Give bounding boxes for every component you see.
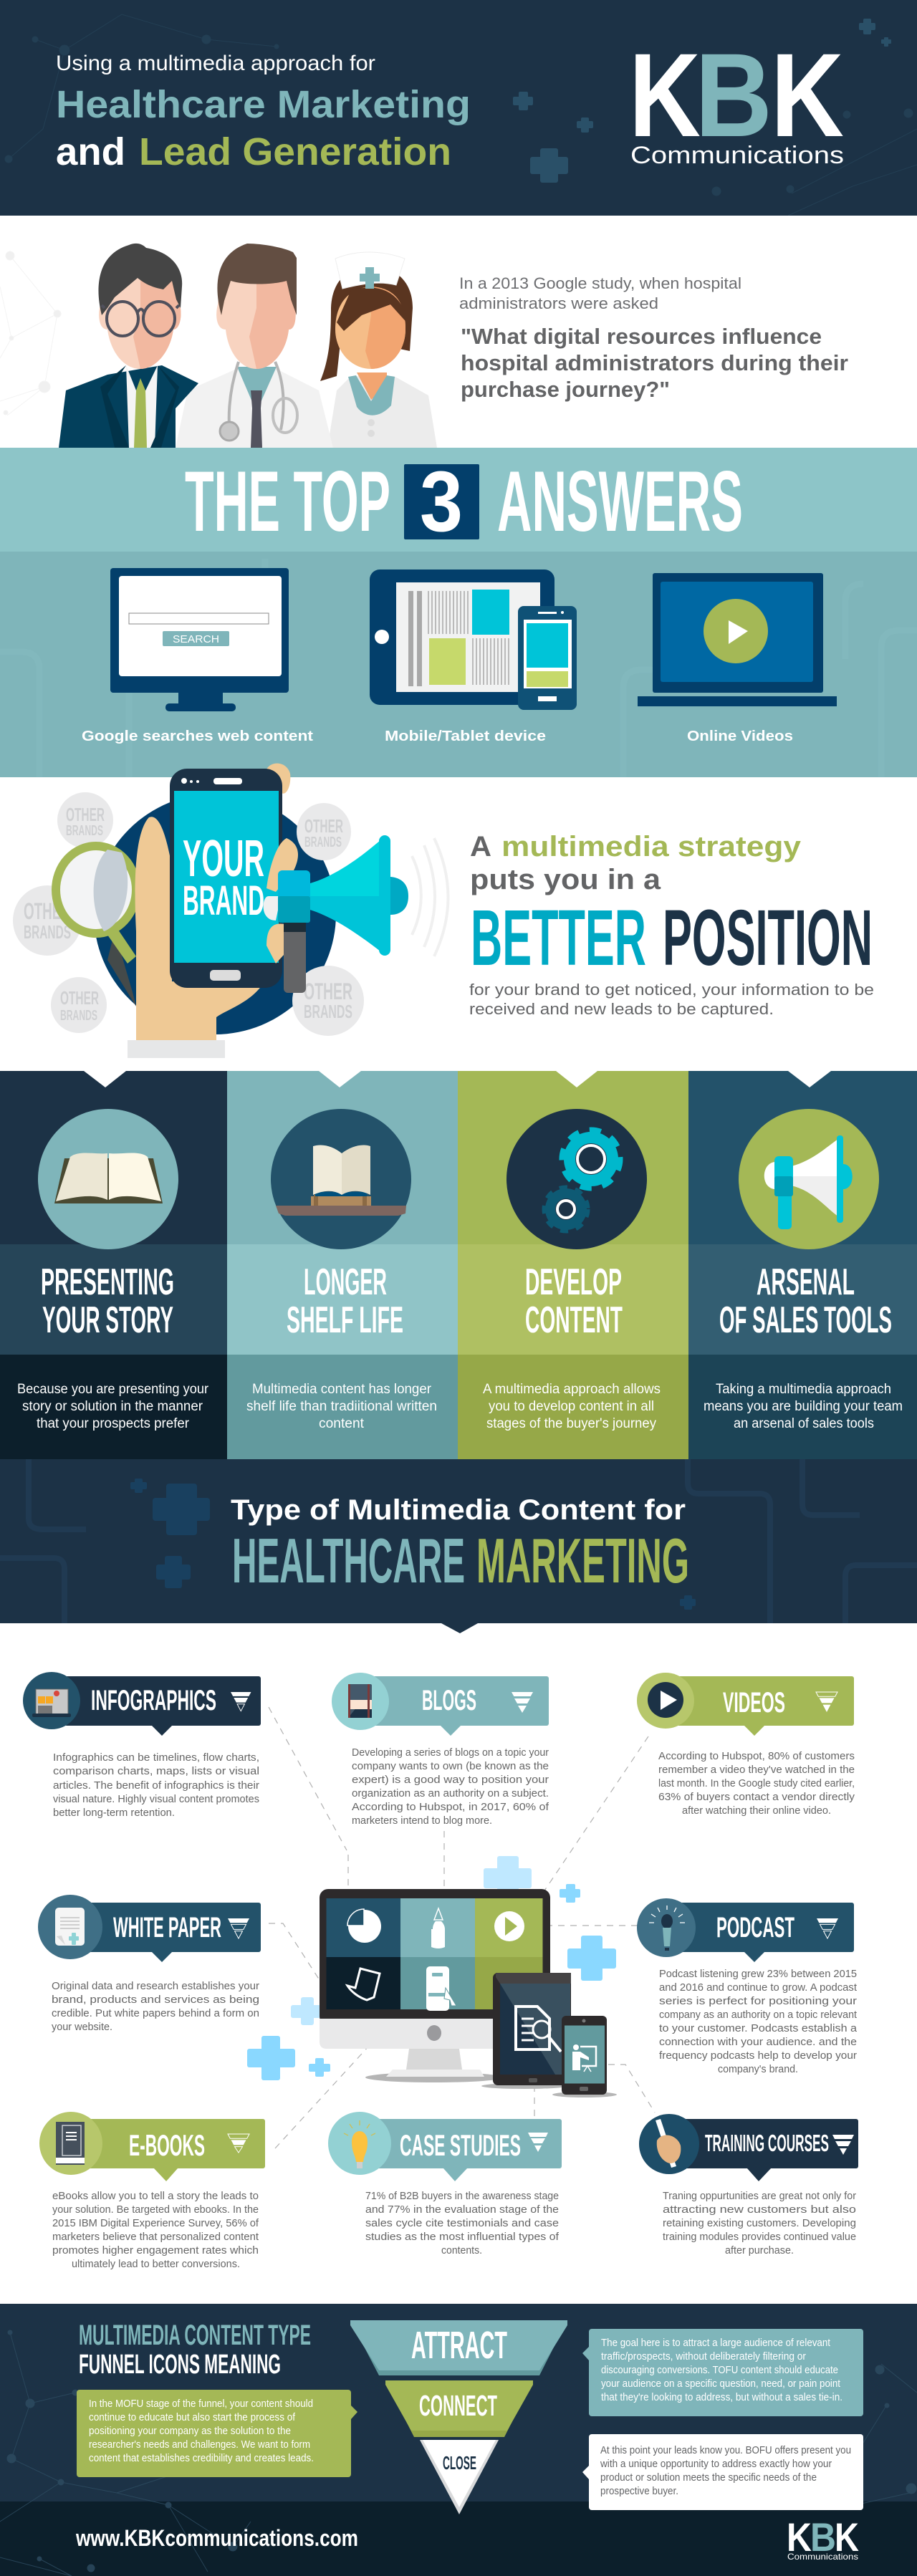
card: infographics bbox=[23, 1672, 261, 1819]
heading bbox=[719, 1261, 892, 1341]
card: blogs: BLOGS bbox=[422, 1685, 476, 1716]
text: after purchase. bbox=[725, 2244, 794, 2257]
heading: FUNNEL ICONS MEANING bbox=[79, 2350, 281, 2380]
panel: hospital administrators bbox=[0, 216, 917, 448]
text: A multimedia approach allows bbox=[483, 1382, 661, 1397]
text bbox=[352, 1746, 549, 1827]
title: Lead Generation bbox=[139, 130, 451, 173]
text: 63% of buyers contact a vendor directly bbox=[658, 1791, 855, 1803]
title: Using a multimedia approach for bbox=[56, 52, 375, 75]
callout: attract: your audience on a specific question, need, or pain point bbox=[601, 2378, 841, 2390]
card: videos: VIDEOS bbox=[723, 1687, 785, 1719]
icon: gears bbox=[544, 1130, 620, 1231]
card: e-books bbox=[39, 2112, 265, 2270]
illustration: monitor, tablet and phone bbox=[247, 1856, 617, 2097]
text: comparison charts, maps, lists or visual bbox=[53, 1765, 259, 1777]
connect stage: CONNECT bbox=[419, 2389, 497, 2422]
panel: funnel icons meaning bbox=[0, 2304, 917, 2576]
logo: footer KBK: Communications bbox=[787, 2552, 858, 2562]
text: company as an authority on a topic relevant bbox=[659, 2009, 858, 2021]
icon: funnel bbox=[816, 1692, 837, 1712]
card: blogs bbox=[332, 1673, 549, 1827]
icon: microphone bbox=[649, 1905, 685, 1951]
question quote: purchase journey?" bbox=[461, 377, 670, 402]
title bbox=[56, 52, 471, 173]
text: 2015 IBM Digital Experience Survey, 56% of bbox=[52, 2217, 259, 2229]
panel: better position bbox=[13, 764, 874, 1058]
heading: MULTIMEDIA CONTENT TYPE bbox=[79, 2320, 311, 2351]
text: Developing a series of blogs on a topic your bbox=[352, 1746, 549, 1759]
icon: play bbox=[648, 1682, 683, 1718]
text bbox=[658, 1750, 855, 1817]
card: podcast: PODCAST bbox=[716, 1912, 794, 1943]
icon: light blue plus signs bbox=[247, 1856, 616, 2080]
callout: attract bbox=[582, 2329, 863, 2416]
text: to your customer. Podcasts establish a bbox=[659, 2022, 858, 2034]
icon: hand with diploma bbox=[656, 2119, 681, 2168]
text: studies as the most influential types of bbox=[365, 2231, 560, 2243]
card: white paper: WHITE PAPER bbox=[113, 1912, 221, 1943]
text: retaining existing customers. Developing bbox=[663, 2217, 856, 2229]
website url: www.KBKcommunications.com bbox=[75, 2525, 358, 2551]
labels: Online Videos bbox=[687, 729, 793, 744]
question quote: hospital administrators during their bbox=[461, 350, 848, 375]
icon: funnel bbox=[832, 2135, 854, 2155]
doctor with stethoscope bbox=[176, 244, 333, 448]
title: and bbox=[56, 130, 125, 173]
callout: close: product or solution meets the specific needs of the bbox=[600, 2471, 817, 2484]
text: sales cycle cite testimonials and case bbox=[365, 2217, 559, 2229]
nurse bbox=[320, 252, 437, 448]
panel: the top 3 answers bbox=[0, 448, 917, 777]
strategy heading bbox=[470, 831, 802, 895]
illustration: phone, hand and megaphone: OTHER bbox=[24, 898, 71, 924]
card: podcast bbox=[637, 1898, 858, 2075]
icon: pen bbox=[431, 1908, 445, 1948]
card: training courses bbox=[639, 2114, 858, 2257]
text: an arsenal of sales tools bbox=[734, 1416, 874, 1431]
icon: funnel bbox=[512, 1692, 533, 1713]
text: ultimately lead to better conversions. bbox=[72, 2258, 240, 2270]
icon: megaphone bbox=[764, 1135, 853, 1229]
labels bbox=[82, 729, 793, 744]
text: after watching their online video. bbox=[682, 1804, 831, 1817]
logo: KBK Communications bbox=[629, 29, 844, 169]
panel: arsenal of sales tools bbox=[688, 1071, 917, 1459]
strategy description: received and new leads to be captured. bbox=[469, 1000, 774, 1018]
text: brand, products and services as being bbox=[52, 1994, 259, 2006]
panel: longer shelf life bbox=[227, 1071, 458, 1459]
icon: banner plus signs bbox=[130, 1479, 696, 1610]
text: better long-term retention. bbox=[53, 1807, 175, 1819]
text bbox=[246, 1382, 437, 1431]
illustration: phone, hand and megaphone: BRANDS bbox=[304, 1001, 352, 1022]
callout: close bbox=[582, 2434, 863, 2510]
text: According to Hubspot, 80% of customers bbox=[658, 1750, 855, 1762]
icon: play button bbox=[494, 1911, 524, 1941]
heading: THE TOP bbox=[185, 453, 390, 549]
heading: Type of Multimedia Content for bbox=[231, 1494, 686, 1526]
icon: document and cursor bbox=[426, 1966, 456, 2011]
text: that your prospects prefer bbox=[37, 1416, 190, 1431]
labels: Google searches web content bbox=[82, 729, 313, 744]
icon: laptop video bbox=[638, 573, 837, 706]
strategy heading: puts you in a bbox=[470, 864, 661, 895]
close stage bbox=[420, 2440, 499, 2514]
strategy description: for your brand to get noticed, your information to be bbox=[469, 981, 874, 999]
text: visual nature. Highly visual content promotes bbox=[53, 1793, 259, 1805]
text: Podcast listening grew 23% between 2015 bbox=[659, 1968, 857, 1980]
text bbox=[52, 1980, 259, 2033]
callout: attract: traffic/prospects, without deliberately filtering or bbox=[601, 2350, 806, 2363]
card: videos bbox=[637, 1673, 855, 1817]
icon: header plus signs bbox=[513, 19, 891, 183]
text: According to Hubspot, in 2017, 60% of bbox=[352, 1801, 549, 1813]
text: content bbox=[319, 1416, 365, 1431]
heading: LONGER bbox=[304, 1261, 387, 1303]
funnel bbox=[350, 2320, 567, 2514]
text: means you are building your team bbox=[704, 1399, 903, 1414]
question quote bbox=[461, 324, 848, 402]
icon: funnel bbox=[528, 2133, 548, 2152]
icon: funnel bbox=[228, 1918, 249, 1938]
logo: KBK Communications: K bbox=[629, 29, 701, 162]
panel: develop content bbox=[458, 1071, 688, 1459]
text: articles. The benefit of infographics is their bbox=[53, 1779, 259, 1792]
attract stage bbox=[350, 2320, 567, 2375]
illustration: phone, hand and megaphone: OTHER bbox=[304, 979, 352, 1004]
text: your solution. Be targeted with ebooks. In the bbox=[52, 2203, 259, 2216]
card: white paper bbox=[38, 1895, 261, 2033]
heading: MARKETING bbox=[476, 1525, 689, 1596]
icon: book bbox=[56, 2122, 85, 2165]
icon: desktop search: SEARCH bbox=[173, 633, 219, 645]
better position: BETTER bbox=[471, 894, 646, 982]
callout: close: At this point your leads know you. BOFU offers present you bbox=[600, 2444, 851, 2456]
callout: attract: discouraging conversions. TOFU content should educate bbox=[601, 2364, 838, 2376]
text: shelf life than tradiitional written bbox=[246, 1399, 437, 1414]
logo: KBK Communications: K bbox=[771, 29, 844, 162]
icon: funnel bbox=[817, 1918, 838, 1938]
text bbox=[483, 1382, 661, 1431]
connect stage bbox=[385, 2380, 533, 2437]
illustration: phone, hand and megaphone: BRANDS bbox=[66, 823, 103, 839]
logo: footer KBK bbox=[787, 2514, 859, 2562]
heading bbox=[79, 2320, 311, 2380]
text bbox=[704, 1382, 903, 1431]
icon: notebook bbox=[348, 1684, 372, 1718]
text bbox=[53, 1751, 259, 1819]
heading bbox=[231, 1494, 689, 1596]
question quote: "What digital resources influence bbox=[461, 324, 822, 349]
logo: footer KBK: K bbox=[787, 2514, 812, 2560]
doctor with glasses bbox=[59, 244, 198, 448]
heading bbox=[41, 1261, 174, 1341]
heading: CONTENT bbox=[525, 1299, 623, 1341]
illustration: phone, hand and megaphone: BRANDS bbox=[60, 1008, 97, 1024]
intro text: In a 2013 Google study, when hospital bbox=[459, 274, 741, 292]
panel: presenting your story bbox=[0, 1071, 227, 1459]
heading: YOUR STORY bbox=[42, 1299, 173, 1341]
text: expert) is a good way to position your bbox=[352, 1774, 549, 1786]
text: stages of the buyer's journey bbox=[486, 1416, 656, 1431]
text: credible. Put white papers behind a form on bbox=[52, 2007, 259, 2019]
text: Multimedia content has longer bbox=[252, 1382, 432, 1397]
attract stage: ATTRACT bbox=[411, 2324, 507, 2367]
callout: close: with a unique opportunity to address exactly how your bbox=[600, 2458, 832, 2470]
text: Original data and research establishes your bbox=[52, 1980, 259, 1992]
illustration: phone, hand and megaphone: BRAND bbox=[183, 878, 264, 924]
text: company wants to own (be known as the bbox=[352, 1760, 549, 1772]
text bbox=[663, 2190, 856, 2257]
panel: type of multimedia content banner bbox=[0, 1459, 917, 1633]
card: e-books: E-BOOKS bbox=[129, 2128, 205, 2162]
callout: connect: researcher's needs and challenges. We want to form bbox=[89, 2438, 310, 2451]
icon: document bbox=[55, 1908, 85, 1946]
text: eBooks allow you to tell a story the leads to bbox=[52, 2190, 259, 2202]
icon: pie chart bbox=[347, 1909, 381, 1943]
text: your website. bbox=[52, 2021, 112, 2033]
text: series is perfect for positioning your bbox=[659, 1995, 857, 2007]
title: Healthcare Marketing bbox=[56, 83, 471, 126]
heading bbox=[287, 1261, 403, 1341]
text: Infographics can be timelines, flow charts, bbox=[53, 1751, 259, 1764]
close stage: CLOSE bbox=[443, 2452, 476, 2474]
callout: connect: content that establishes credibility and creates leads. bbox=[89, 2452, 314, 2464]
labels: Mobile/Tablet device bbox=[385, 729, 546, 744]
icon: tablet and phone bbox=[370, 569, 577, 710]
strategy heading: A bbox=[470, 831, 491, 862]
icon: infographic laptop bbox=[32, 1689, 71, 1717]
icon: desktop search bbox=[110, 568, 289, 711]
text: attracting new customers but also bbox=[663, 2203, 856, 2216]
logo: footer KBK: K bbox=[835, 2514, 859, 2560]
text bbox=[659, 1968, 858, 2075]
text: 71% of B2B buyers in the awareness stage bbox=[365, 2190, 559, 2202]
text: you to develop content in all bbox=[489, 1399, 654, 1414]
logo: KBK Communications: Communications bbox=[630, 142, 844, 169]
text: story or solution in the manner bbox=[22, 1399, 203, 1414]
callout: connect: positioning your company as the solution to the bbox=[89, 2425, 291, 2437]
text: training modules provides continued value bbox=[663, 2231, 856, 2243]
illustration: phone, hand and megaphone: BRANDS bbox=[24, 921, 71, 943]
text: Taking a multimedia approach bbox=[716, 1382, 891, 1397]
text: and 2016 and continue to grow. A podcast bbox=[659, 1981, 858, 1994]
heading bbox=[525, 1261, 623, 1341]
intro text: administrators were asked bbox=[459, 294, 658, 312]
heading: 3 bbox=[420, 453, 463, 549]
text bbox=[17, 1382, 209, 1431]
callout: close: prospective buyer. bbox=[600, 2485, 678, 2497]
text: connection with your audience. and the bbox=[659, 2036, 857, 2048]
icon: funnel bbox=[228, 2134, 249, 2153]
text: last month. In the Google study cited earlier, bbox=[658, 1777, 855, 1789]
logo: KBK Communications: B bbox=[695, 29, 772, 162]
callout: attract: that they're looking to address, but without a sales tie-in. bbox=[601, 2391, 842, 2403]
illustration: phone, hand and megaphone: YOUR bbox=[183, 830, 264, 888]
text: marketers intend to blog more. bbox=[352, 1815, 492, 1827]
callout: connect: In the MOFU stage of the funnel, your content should bbox=[89, 2398, 313, 2410]
dashed connector lines bbox=[269, 1707, 655, 2148]
icon: book on shelf bbox=[276, 1145, 406, 1216]
heading: PRESENTING bbox=[41, 1261, 174, 1303]
panel: header bbox=[0, 0, 917, 216]
icon: funnel bbox=[231, 1692, 251, 1711]
heading: HEALTHCARE bbox=[232, 1525, 465, 1596]
card: infographics: INFOGRAPHICS bbox=[91, 1685, 216, 1716]
card: case studies bbox=[328, 2112, 562, 2257]
text: marketers believe that personalized content bbox=[52, 2231, 259, 2243]
text: promotes higher engagement rates which bbox=[52, 2244, 259, 2257]
strategy heading: multimedia strategy bbox=[501, 831, 802, 862]
text: Because you are presenting your bbox=[17, 1382, 209, 1397]
heading: DEVELOP bbox=[525, 1261, 622, 1303]
logo: footer KBK: B bbox=[810, 2514, 836, 2560]
callout: connect: continue to educate but also start the process of bbox=[89, 2411, 296, 2423]
text bbox=[365, 2190, 560, 2257]
text: contents. bbox=[441, 2244, 482, 2257]
text bbox=[52, 2190, 259, 2270]
text: frequency podcasts help to develop your bbox=[659, 2049, 857, 2062]
card: case studies: CASE STUDIES bbox=[400, 2128, 521, 2162]
icon: open book bbox=[54, 1153, 163, 1203]
strategy description bbox=[469, 981, 874, 1018]
text: organization as an authority on a subject. bbox=[352, 1787, 549, 1799]
phone bbox=[562, 2016, 607, 2095]
illustration: phone, hand and megaphone: BRANDS bbox=[304, 835, 342, 850]
heading: SHELF LIFE bbox=[287, 1299, 403, 1341]
illustration: phone, hand and megaphone: OTHER bbox=[60, 987, 99, 1009]
icon: light bulb bbox=[344, 2120, 375, 2168]
icon: document sheet bbox=[347, 1969, 380, 2000]
heading bbox=[185, 453, 743, 549]
callout: attract: The goal here is to attract a large audience of relevant bbox=[601, 2337, 831, 2349]
text: remember a video they've watched in the bbox=[658, 1764, 855, 1776]
text: company's brand. bbox=[718, 2063, 798, 2075]
illustration: phone, hand and megaphone: OTHER bbox=[66, 804, 105, 825]
intro text bbox=[459, 274, 741, 312]
callout: connect bbox=[77, 2390, 357, 2477]
text: and 77% in the evaluation stage of the bbox=[365, 2203, 559, 2216]
text: Traning oppurtunities are great not only for bbox=[663, 2190, 856, 2202]
illustration: phone, hand and megaphone: OTHER bbox=[304, 815, 343, 837]
tablet bbox=[493, 1973, 571, 2085]
illustration: phone, hand and megaphone bbox=[13, 764, 448, 1058]
